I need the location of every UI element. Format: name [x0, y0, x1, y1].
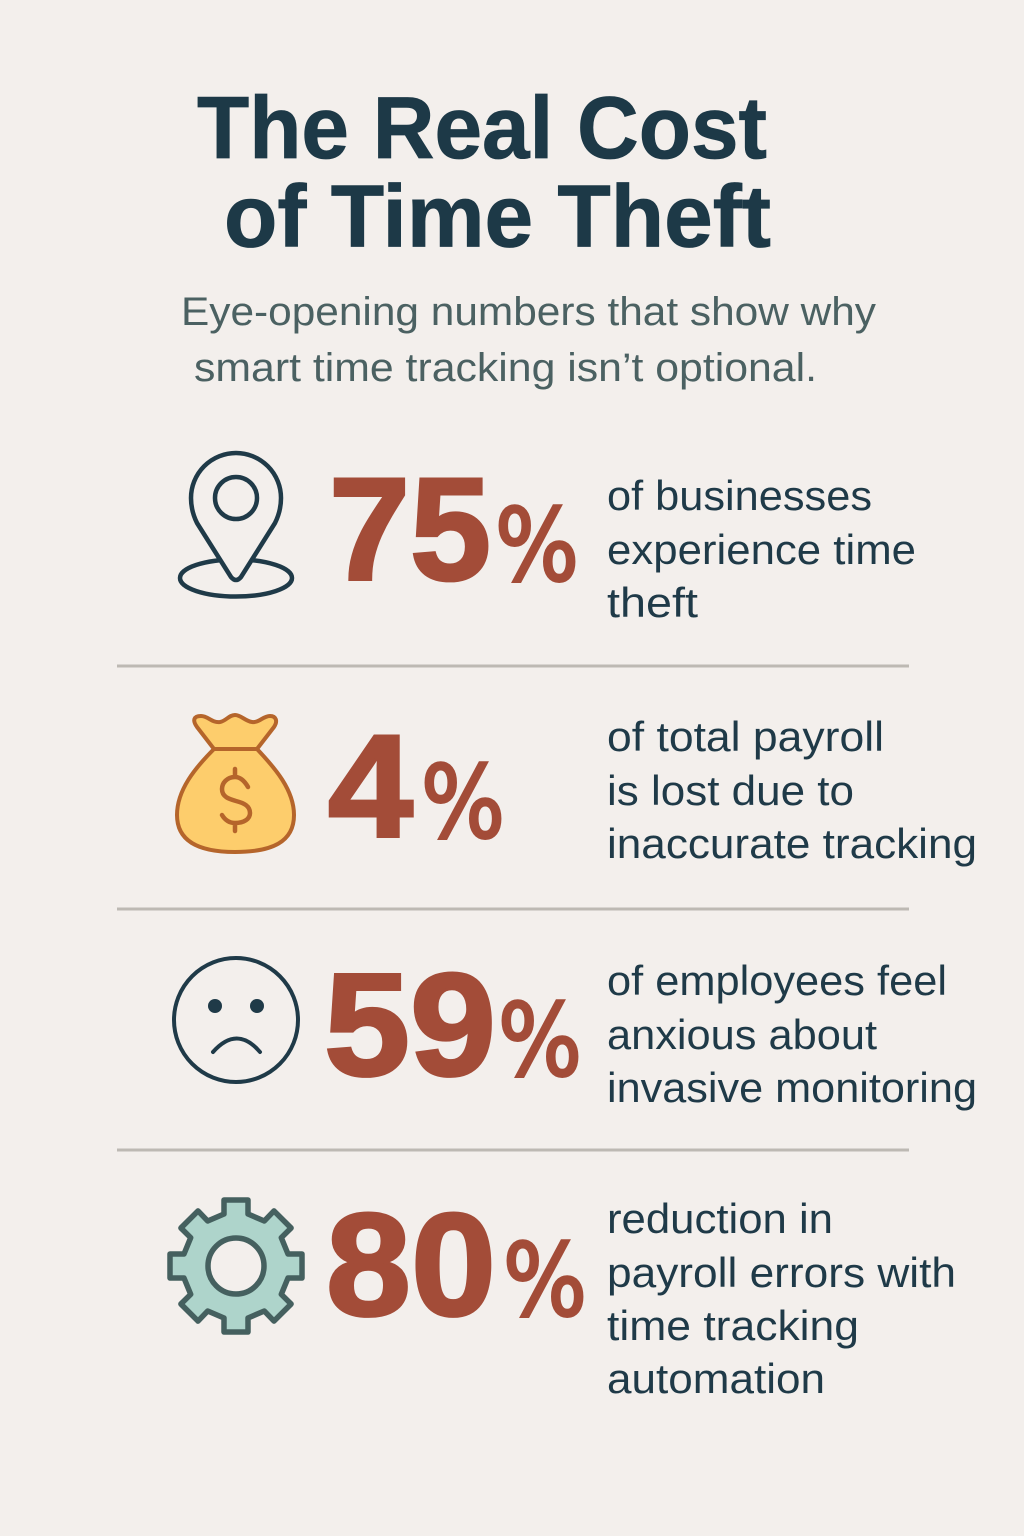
- subtitle: Eye-opening numbers that show why: [181, 290, 876, 334]
- icon: money bag: [177, 715, 294, 852]
- text: 59% description: invasive monitoring: [607, 1064, 977, 1111]
- stat: 75%: 75: [329, 448, 491, 610]
- stat: 75%: [329, 448, 579, 610]
- stat: 59%: [324, 943, 582, 1106]
- text: 59% description: anxious about: [607, 1011, 877, 1058]
- text: 75% description: [607, 472, 916, 626]
- stat: 75%: %: [495, 487, 579, 604]
- text: 75% description: theft: [607, 579, 698, 626]
- panel: 59% stat: [174, 943, 977, 1111]
- stat: 4%: 4: [328, 704, 413, 868]
- icon: location pin: [180, 453, 292, 596]
- stat: 80%: [326, 1183, 587, 1346]
- text: 59% description: [607, 957, 977, 1111]
- panel: 4% stat: [177, 704, 977, 868]
- subtitle: [181, 290, 876, 390]
- text: 75% description: experience time: [607, 526, 916, 573]
- text: 80% description: reduction in: [607, 1195, 833, 1242]
- text: 4% description: of total payroll: [607, 713, 884, 760]
- title: [197, 78, 771, 266]
- title: The Real Cost: [197, 78, 767, 177]
- text: 80% description: time tracking: [607, 1302, 859, 1349]
- icon: sad face: [174, 958, 298, 1082]
- stat: 4%: [328, 704, 505, 868]
- text: 75% description: of businesses: [607, 472, 872, 519]
- text: 80% description: payroll errors with: [607, 1249, 956, 1296]
- text: 59% description: of employees feel: [607, 957, 947, 1004]
- stat: 80%: 80: [326, 1183, 496, 1346]
- stat: 59%: %: [498, 982, 582, 1099]
- text: 4% description: inaccurate tracking: [607, 820, 977, 867]
- stat: 80%: %: [503, 1222, 587, 1339]
- stat: 59%: 59: [324, 943, 496, 1106]
- text: 80% description: automation: [607, 1355, 825, 1402]
- stat: 4%: %: [421, 744, 505, 861]
- panel: 75% stat: [180, 448, 916, 626]
- subtitle: smart time tracking isn’t optional.: [194, 346, 817, 390]
- title: of Time Theft: [224, 166, 771, 266]
- icon: gear: [170, 1200, 302, 1332]
- text: 4% description: is lost due to: [607, 767, 854, 814]
- text: 4% description: [607, 713, 977, 867]
- text: 80% description: [607, 1195, 956, 1402]
- panel: 80% stat: [170, 1183, 956, 1402]
